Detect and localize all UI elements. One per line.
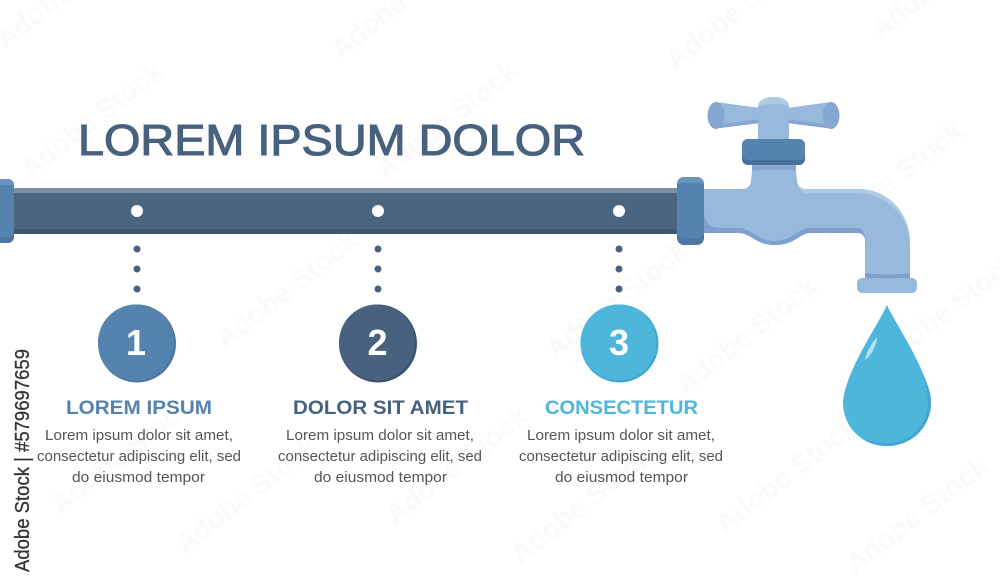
connector dots 3 xyxy=(616,246,622,292)
white marker dots on pipe xyxy=(131,205,625,217)
text: Adobe Stock xyxy=(380,400,534,530)
number badge 1: 1 xyxy=(126,322,146,363)
body text 2: Lorem ipsum dolor sit amet, xyxy=(286,428,474,444)
heading 3: CONSECTETUR xyxy=(545,397,698,419)
number badge 2: 2 xyxy=(367,322,388,363)
body text 1: consectetur adipiscing elit, sed xyxy=(37,449,241,465)
body text 1 xyxy=(37,428,241,486)
text: Adobe Stock xyxy=(170,430,324,560)
text: Adobe Stock xyxy=(45,390,199,520)
title: LOREM IPSUM DOLOR xyxy=(78,116,585,165)
text: Adobe Stock xyxy=(710,410,864,540)
stock id vertical label: Adobe Stock | #579697659 xyxy=(12,349,34,572)
heading 1: LOREM IPSUM xyxy=(66,397,212,419)
step 2 xyxy=(278,246,482,486)
heading 2: DOLOR SIT AMET xyxy=(293,397,468,419)
text: Adobe Stock xyxy=(540,235,694,365)
faucet handle xyxy=(708,97,840,142)
connector dots 1 xyxy=(134,246,140,292)
body text 2 xyxy=(278,428,482,486)
water drop xyxy=(843,305,931,446)
text: Adobe Stock xyxy=(505,440,659,570)
pipe xyxy=(0,179,680,243)
text: Adobe Stock xyxy=(670,270,824,400)
step 1 xyxy=(37,246,241,486)
body text 1: Lorem ipsum dolor sit amet, xyxy=(45,428,233,444)
text: Adobe Stock xyxy=(815,115,969,245)
body text 1: do eiusmod tempor xyxy=(72,470,205,486)
text: Adobe Stock xyxy=(370,55,524,185)
faucet body and spout xyxy=(700,163,917,293)
text: Adobe Stock xyxy=(840,450,994,580)
step 3 xyxy=(519,246,723,486)
faucet xyxy=(677,97,917,293)
number badge 3 xyxy=(580,304,658,382)
faucet valve nut xyxy=(742,139,805,165)
faucet collar xyxy=(677,177,704,245)
number badge 3: 3 xyxy=(609,322,629,363)
connector dots 2 xyxy=(374,246,382,292)
body text 3: consectetur adipiscing elit, sed xyxy=(519,449,723,465)
pipe left collar xyxy=(0,179,14,243)
body text 2: do eiusmod tempor xyxy=(314,470,447,486)
body text 2: consectetur adipiscing elit, sed xyxy=(278,449,482,465)
text: Adobe Stock xyxy=(15,55,169,185)
body text 3: Lorem ipsum dolor sit amet, xyxy=(527,428,715,444)
number badge 1 xyxy=(98,304,176,382)
body text 3: do eiusmod tempor xyxy=(555,470,688,486)
text: Adobe Stock xyxy=(210,225,364,355)
number badge 2 xyxy=(339,304,417,382)
body text 3 xyxy=(519,428,723,486)
